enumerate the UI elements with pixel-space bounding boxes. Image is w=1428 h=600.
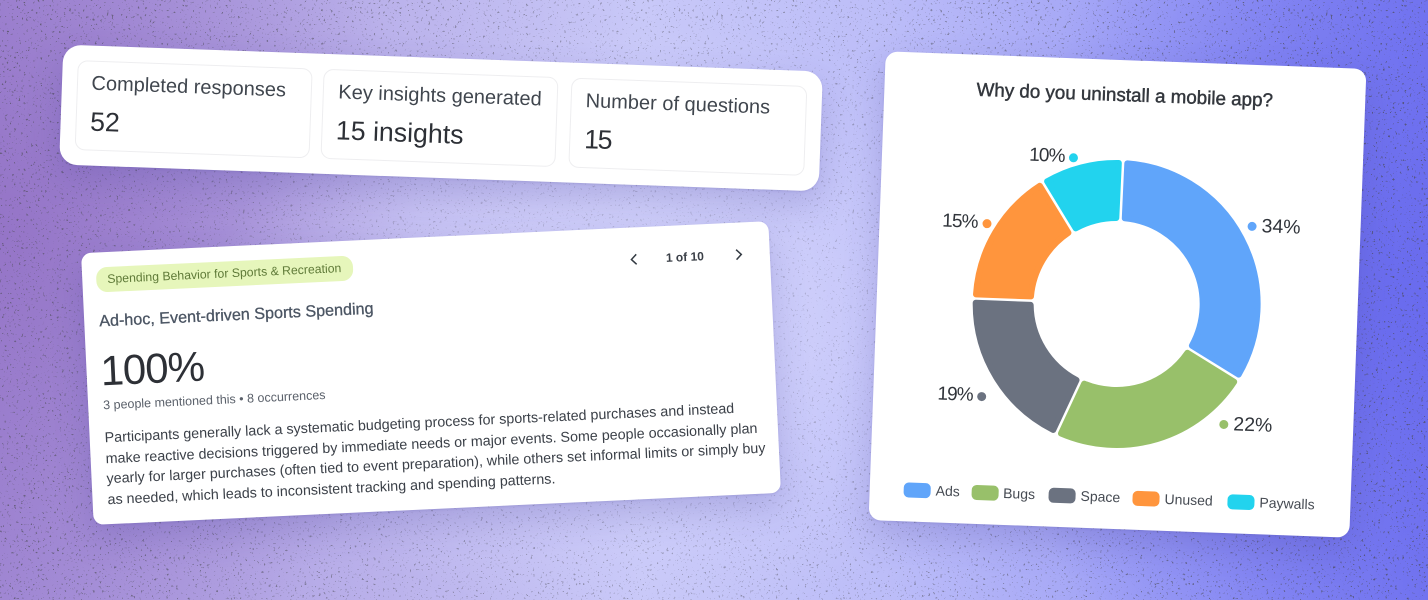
value label: 15% xyxy=(942,211,992,233)
stat card: number of questions xyxy=(568,78,807,176)
insight description: as needed, which leads to inconsistent tracking and spending patterns. xyxy=(107,471,556,508)
legend label: unused: Unused xyxy=(1164,491,1213,509)
stat label: Number of questions xyxy=(585,90,770,118)
value label: 10% xyxy=(1029,145,1078,167)
donut chart xyxy=(972,160,1261,448)
value: 22%: 22% xyxy=(1233,413,1273,437)
legend label: paywalls: Paywalls xyxy=(1259,494,1315,512)
value: 34%: 34% xyxy=(1261,215,1301,239)
value: 19%: 19% xyxy=(937,383,973,406)
slice: unused 15% xyxy=(976,184,1070,298)
category tag xyxy=(96,256,354,292)
dot: bugs xyxy=(1219,419,1228,429)
category tag: Spending Behavior for Sports & Recreation xyxy=(107,261,342,286)
insight description: yearly for larger purchases (often tied to event preparation), while others set informal limits or simply buy xyxy=(106,441,766,487)
dot: paywalls xyxy=(1069,153,1078,162)
value label: 34% xyxy=(1248,215,1301,239)
value label: 19% xyxy=(937,383,986,406)
dot: space xyxy=(977,391,986,401)
value label: 22% xyxy=(1219,413,1273,437)
insight title: Ad-hoc, Event-driven Sports Spending xyxy=(99,300,374,330)
stat value: 15 xyxy=(583,124,611,155)
slice: space 19% xyxy=(971,303,1079,431)
occurrences note: 3 people mentioned this • 8 occurrences xyxy=(103,387,326,412)
insight description xyxy=(104,401,766,508)
value: 10%: 10% xyxy=(1029,145,1065,167)
icon: previous chevron xyxy=(630,254,638,265)
pagination xyxy=(630,249,742,265)
legend swatch: ads xyxy=(903,482,931,498)
slice: ads 34% xyxy=(1119,163,1263,375)
legend label: bugs: Bugs xyxy=(1003,485,1035,502)
legend swatch: bugs xyxy=(971,485,998,501)
panel: donut chart card xyxy=(869,51,1366,538)
legend label: ads: Ads xyxy=(935,482,960,499)
icon: next chevron xyxy=(736,249,742,260)
stat value: 52 xyxy=(89,107,120,138)
legend label: space: Space xyxy=(1080,488,1121,505)
insight description: make reactive decisions triggered by immediate needs or major events. Some people occasionally plan xyxy=(105,420,758,467)
stat label: Key insights generated xyxy=(337,81,542,110)
stat label: Completed responses xyxy=(91,72,286,101)
dot: unused xyxy=(982,218,991,228)
slice: paywalls 10% xyxy=(1045,160,1119,230)
value: 15%: 15% xyxy=(942,211,978,233)
panel: summary stats xyxy=(59,45,822,191)
chart title: Why do you uninstall a mobile app? xyxy=(976,79,1273,111)
stat card: completed responses xyxy=(74,60,312,158)
page indicator: 1 of 10 xyxy=(666,249,704,265)
stat card: key insights xyxy=(319,69,558,167)
panel: insight detail xyxy=(81,221,781,525)
stat value: 15 insights xyxy=(335,115,464,150)
legend xyxy=(904,482,1315,512)
insight description: Participants generally lack a systematic budgeting process for sports-related purchases and instead xyxy=(104,401,735,446)
legend swatch: paywalls xyxy=(1227,494,1255,510)
slice: bugs 22% xyxy=(1061,348,1235,449)
legend swatch: unused xyxy=(1132,491,1160,507)
legend swatch: space xyxy=(1048,488,1076,504)
dot: ads xyxy=(1247,221,1256,231)
percentage: 100% xyxy=(99,342,205,394)
